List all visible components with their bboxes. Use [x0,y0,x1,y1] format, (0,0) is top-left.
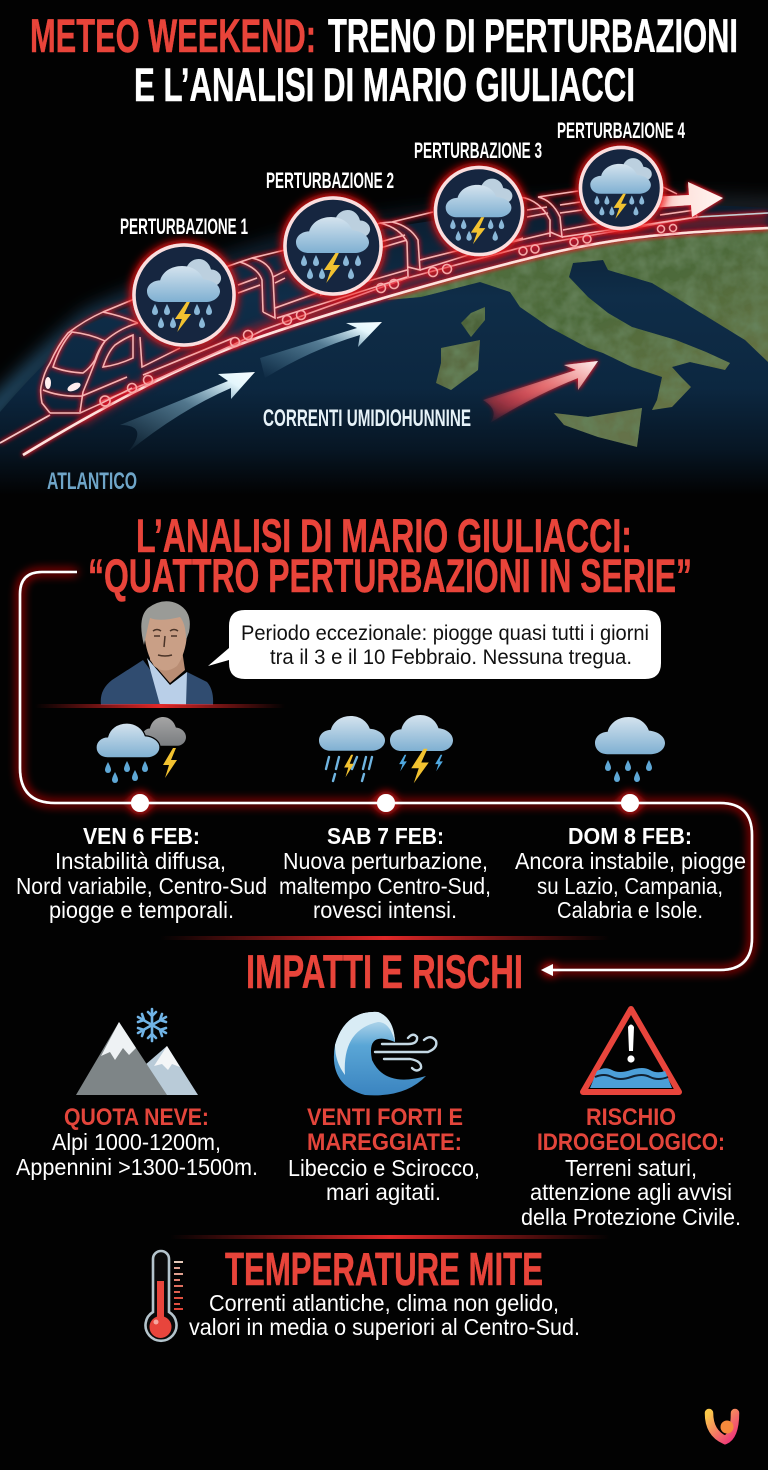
heading: analysis [88,509,692,602]
risk: winds and storm surges: VENTI FORTI E [307,1104,463,1131]
label: Atlantico: ATLANTICO [47,468,137,495]
day: Saturday: rovesci intensi. [313,897,457,923]
shirt [147,658,187,705]
day: Sunday: Ancora instabile, piogge [515,848,746,874]
circle 1 storm icon [147,258,222,332]
day: Friday: piogge e temporali. [49,897,234,923]
day: Friday: Nord variabile, Centro-Sud [16,873,267,899]
neck [150,650,185,683]
day: Sunday: Calabria e Isole. [557,897,703,923]
facial features [153,630,178,656]
day: Saturday: SAB 7 FEB: [327,823,444,849]
risk: hydrogeological: IDROGEOLOGICO: [537,1129,725,1156]
icon: Sunday weather [595,717,665,782]
red line under portrait [35,704,285,708]
day: Saturday: Nuova perturbazione, [283,848,488,874]
circle 3 ring [436,168,522,254]
perturbation 4 [557,118,685,228]
risk: hydrogeological: RISCHIO [586,1104,676,1131]
train [41,187,697,413]
day: Saturday [279,823,491,923]
title [30,9,738,111]
risk: snow level [16,1104,258,1180]
icon: snowy mountains [76,1009,198,1095]
heading: impacts and risks: IMPATTI E RISCHI [246,945,523,998]
speech bubble: tra il 3 e il 10 Febbraio. Nessuna tregua. [270,645,632,669]
day: Sunday: DOM 8 FEB: [568,823,692,849]
arrow: train direction [650,182,723,217]
panel: train map illustration [0,118,768,497]
portrait: Mario Giuliacci [101,601,213,705]
label 3: PERTURBAZIONE 3 [414,138,542,163]
circle 2 storm icon [296,209,371,283]
temperature text: Correnti atlantiche, clima non gelido, [209,1290,559,1316]
circle 4 storm icon [590,157,653,219]
label: currents: CORRENTI UMIDIOHUNNINE [263,405,471,432]
hair [141,601,190,645]
icon: wave and wind [334,1012,436,1095]
earth globe [0,204,768,497]
circle 2 ring [285,198,381,294]
speech bubble [208,610,661,679]
face [144,606,187,670]
circle 3 storm icon [446,178,513,244]
day: Friday: VEN 6 FEB: [83,823,200,849]
icon: thermometer [145,1251,183,1341]
temperature text: valori in media o superiori al Centro-Sud. [189,1314,580,1340]
perturbation 3 [414,138,542,254]
day: Saturday: maltempo Centro-Sud, [279,873,491,899]
speech bubble: Periodo eccezionale: piogge quasi tutti i giorni [241,621,649,645]
rails [0,213,768,455]
day: Sunday: su Lazio, Campania, [537,873,723,899]
risk: snow level: Alpi 1000-1200m, [52,1129,221,1155]
icon: flood warning triangle [583,1009,679,1092]
risk: hydrogeological: della Protezione Civile. [521,1204,741,1230]
label 2: PERTURBAZIONE 2 [266,168,394,193]
circle 1 ring [134,245,234,345]
risk: snow level: Appennini >1300-1500m. [16,1154,258,1180]
temperature text [189,1243,580,1340]
arrow: humid current 2 [260,322,382,378]
risk: winds and storm surges [288,1104,480,1205]
circle 4 ring [580,148,662,228]
perturbation 1 [120,214,248,345]
risk: hydrogeological: Terreni saturi, [565,1155,697,1181]
temperature text: TEMPERATURE MITE [225,1243,543,1295]
icon: Friday weather [96,717,186,783]
risk: winds and storm surges: mari agitati. [326,1179,441,1205]
day: Friday [16,823,267,923]
day: Friday: Instabilità diffusa, [55,848,226,874]
label 1: PERTURBAZIONE 1 [120,214,248,239]
timeline connector [20,572,752,976]
arrow: warm current [483,361,598,423]
arrow: humid current 1 [120,372,255,452]
map of Italy [387,228,768,447]
risk: winds and storm surges: MAREGGIATE: [307,1129,462,1156]
risk: winds and storm surges: Libeccio e Scirocco, [288,1155,480,1181]
risk: hydrogeological: attenzione agli avvisi [530,1179,732,1205]
risk: snow level: QUOTA NEVE: [64,1104,209,1131]
suit [101,660,213,705]
perturbation 2 [266,168,394,294]
icon: Saturday weather [319,715,453,783]
title: METEO WEEKEND: [30,9,316,62]
label 4: PERTURBAZIONE 4 [557,118,685,143]
icon: logo [709,1413,735,1440]
risk: hydrogeological [521,1104,741,1230]
train headlights [45,377,82,393]
day: Sunday [515,823,746,923]
